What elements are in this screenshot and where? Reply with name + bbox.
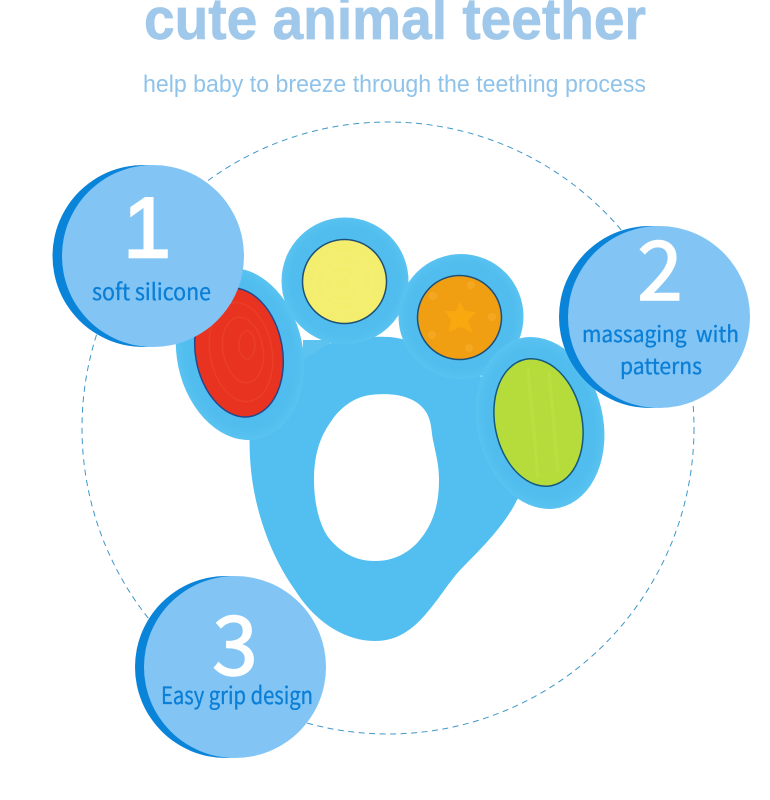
label 1: soft silicone (92, 273, 211, 307)
number 2: 2 (637, 205, 683, 324)
callout 3: easy grip design (135, 576, 326, 758)
number 3: 3 (212, 580, 258, 699)
web between toes (303, 340, 335, 360)
teether body (250, 337, 530, 641)
green toe (459, 324, 621, 522)
red toe (160, 256, 320, 452)
label 3: Easy grip design (161, 676, 313, 711)
teether product illustration (160, 218, 621, 641)
orange toe (398, 254, 524, 379)
callout 2: massaging with patterns: patterns (620, 349, 702, 381)
subtitle: help baby to breeze through the teething process (143, 71, 646, 98)
label 2: massaging with (582, 317, 739, 349)
callout 2: massaging with patterns (559, 205, 750, 408)
dashed circle (82, 122, 694, 734)
number 1: 1 (123, 181, 171, 276)
yellow toe (282, 218, 408, 344)
callout 1: soft silicone (52, 165, 244, 347)
